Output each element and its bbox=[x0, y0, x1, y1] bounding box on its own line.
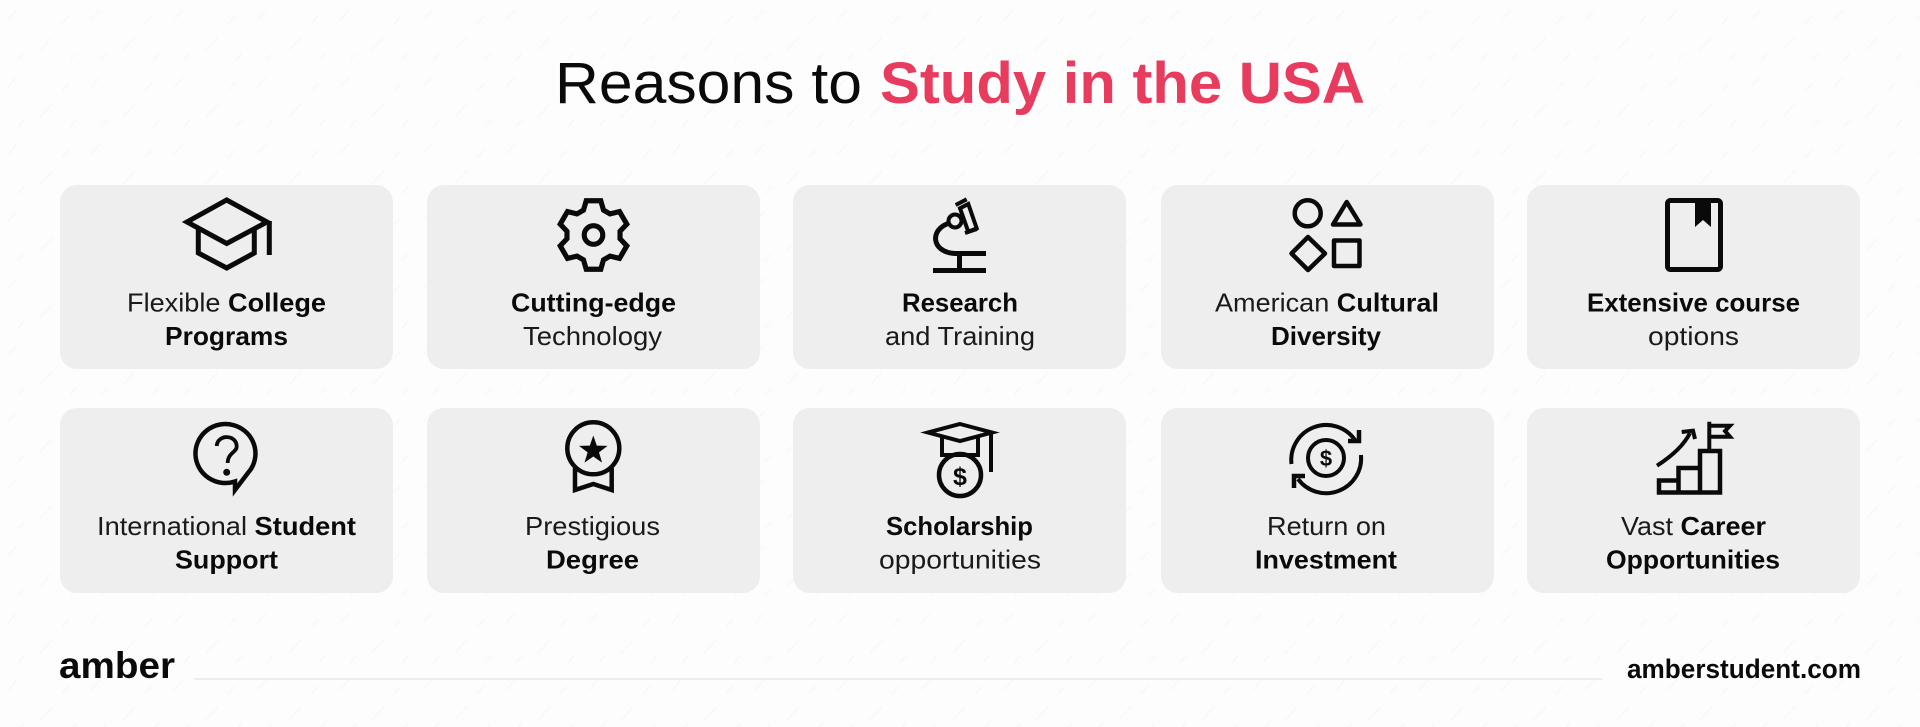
panel: Research and Training bbox=[793, 185, 1126, 369]
panel: International Student Support bbox=[60, 408, 393, 593]
icon: career growth bars and flag bbox=[1657, 422, 1730, 492]
icon: book bbox=[1668, 199, 1720, 270]
icon: graduation cap bbox=[187, 200, 269, 268]
label: Extensive course options: options bbox=[1648, 321, 1739, 351]
panel: Return on Investment bbox=[1161, 408, 1494, 593]
label: Cutting-edge Technology: Technology bbox=[523, 321, 662, 351]
label: Extensive course options bbox=[1587, 288, 1800, 351]
panel: Extensive course options bbox=[1527, 185, 1860, 369]
panel: American Cultural Diversity bbox=[1161, 185, 1494, 369]
icon: shapes bbox=[1292, 200, 1360, 270]
panel: Flexible College Programs bbox=[60, 185, 393, 369]
label: Return on Investment bbox=[1255, 511, 1397, 574]
title: Reasons to bbox=[555, 51, 862, 116]
label: Vast Career Opportunities: Opportunities bbox=[1606, 544, 1780, 574]
icon: question bubble bbox=[195, 424, 255, 490]
label: Prestigious Degree: Prestigious bbox=[525, 511, 660, 541]
panel: Vast Career Opportunities bbox=[1527, 408, 1860, 593]
label: Prestigious Degree bbox=[525, 511, 660, 574]
label: Cutting-edge Technology: Cutting-edge bbox=[511, 288, 676, 318]
panel: Scholarship opportunities bbox=[793, 408, 1126, 593]
label: American Cultural Diversity: American Cultural bbox=[1215, 288, 1439, 318]
title: Study in the USA bbox=[880, 51, 1365, 116]
label: Scholarship opportunities: opportunities bbox=[879, 544, 1041, 574]
label: Vast Career Opportunities: Vast Career bbox=[1621, 511, 1766, 541]
label: Research and Training: and Training bbox=[885, 321, 1035, 351]
label: American Cultural Diversity bbox=[1215, 288, 1439, 351]
footer website: amberstudent.com bbox=[1627, 654, 1861, 684]
label: Flexible College Programs: Programs bbox=[165, 321, 288, 351]
label: Scholarship opportunities: Scholarship bbox=[886, 511, 1033, 541]
label: Research and Training: Research bbox=[902, 288, 1018, 318]
label: Prestigious Degree: Degree bbox=[546, 544, 639, 574]
icon: gear bbox=[560, 201, 627, 269]
label: Extensive course options: Extensive course bbox=[1587, 288, 1800, 318]
label: Cutting-edge Technology bbox=[511, 288, 676, 351]
panel: Prestigious Degree bbox=[427, 408, 760, 593]
label: Return on Investment: Investment bbox=[1255, 544, 1397, 574]
label: International Student Support: International Student bbox=[97, 511, 356, 541]
label: International Student Support bbox=[97, 511, 356, 574]
label: Flexible College Programs bbox=[127, 288, 326, 351]
label: Research and Training bbox=[885, 288, 1035, 351]
title bbox=[555, 51, 1365, 116]
icon: circular return with dollar: $ bbox=[1320, 446, 1332, 471]
icon: scholarship cap and coin bbox=[928, 424, 992, 496]
label: Scholarship opportunities bbox=[879, 511, 1041, 574]
icon: medal bbox=[567, 422, 619, 490]
icon: scholarship cap and coin: $ bbox=[953, 463, 967, 491]
label: International Student Support: Support bbox=[175, 544, 278, 574]
icon: microscope bbox=[933, 199, 986, 270]
label: Vast Career Opportunities bbox=[1606, 511, 1780, 574]
label: American Cultural Diversity: Diversity bbox=[1271, 321, 1382, 351]
label: Flexible College Programs: Flexible College bbox=[127, 288, 326, 318]
footer logo: amber: amber bbox=[59, 645, 175, 686]
label: Return on Investment: Return on bbox=[1267, 511, 1386, 541]
icon: circular return with dollar bbox=[1291, 425, 1361, 493]
panel: Cutting-edge Technology bbox=[427, 185, 760, 369]
